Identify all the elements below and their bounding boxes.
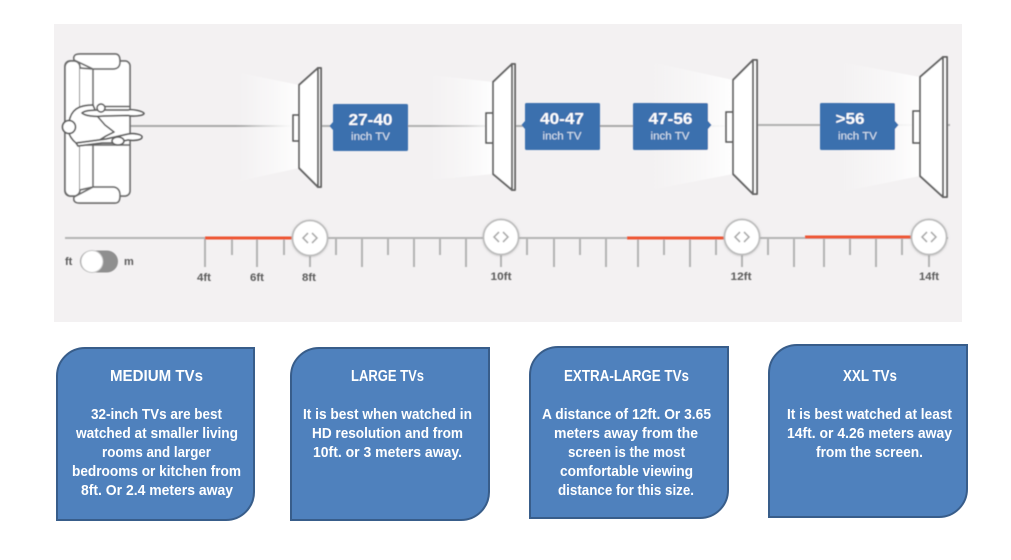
icon: TV 3: [650, 60, 757, 194]
ruler labels: 10ft: [490, 271, 512, 283]
card: large TVs: 10ft. or 3 meters away.: [313, 444, 462, 461]
card: extra-large TVs: EXTRA-LARGE TVs: [564, 368, 689, 385]
card: XXL TVs: from the screen.: [816, 444, 923, 461]
card: extra-large TVs: [530, 347, 728, 518]
card: extra-large TVs: A distance of 12ft. Or 3.65: [542, 406, 711, 423]
label: 40-47 inch TV: [522, 103, 600, 150]
ruler labels: 6ft: [250, 272, 264, 284]
card: medium TVs: 32-inch TVs are best: [91, 406, 222, 423]
card: medium TVs: [57, 348, 254, 520]
label: 40-47 inch TV: inch TV: [542, 130, 582, 142]
label: 27-40 inch TV: 27-40: [348, 112, 393, 129]
label: 40-47 inch TV: 40-47: [540, 111, 584, 128]
card: medium TVs: bedrooms or kitchen from: [72, 463, 241, 480]
card: XXL TVs: 14ft. or 4.26 meters away: [787, 425, 953, 442]
card: extra-large TVs: comfortable viewing: [560, 463, 693, 480]
label: 47-56 inch TV: 47-56: [648, 111, 693, 128]
icon: sofa seen from above: [65, 54, 130, 203]
label: 27-40 inch TV: [330, 104, 408, 151]
slider handle: 10ft: [484, 220, 518, 254]
slider handle: 8ft: [292, 220, 328, 256]
ruler labels: [197, 271, 939, 284]
distance ruler: [65, 220, 948, 267]
ruler labels: 14ft: [919, 271, 939, 283]
viewing axis line: [130, 124, 950, 127]
card: medium TVs: MEDIUM TVs: [110, 368, 203, 385]
card: medium TVs: 8ft. Or 2.4 meters away: [81, 482, 234, 499]
panel: viewing distance diagram: [54, 24, 962, 322]
card: large TVs: HD resolution and from: [312, 425, 463, 442]
ruler labels: 12ft: [730, 271, 752, 283]
card: medium TVs: watched at smaller living: [75, 425, 238, 442]
ruler labels: 8ft: [302, 272, 316, 284]
label: greater than 56 inch TV: >56: [836, 111, 865, 128]
label: greater than 56 inch TV: [820, 103, 898, 150]
unit toggle: ft / m: [65, 250, 134, 272]
icon: TV 1: [235, 68, 321, 187]
icon: TV 2: [430, 64, 515, 190]
icon: seated person: [62, 104, 144, 146]
card: extra-large TVs: distance for this size.: [558, 482, 694, 499]
card: large TVs: LARGE TVs: [351, 368, 424, 385]
label: greater than 56 inch TV: inch TV: [838, 130, 878, 142]
icon: TV 4: [840, 57, 947, 197]
card: XXL TVs: It is best watched at least: [787, 406, 952, 423]
slider handle: 12ft: [724, 220, 760, 254]
card: large TVs: [291, 348, 489, 520]
label: 47-56 inch TV: inch TV: [650, 130, 690, 142]
card: XXL TVs: [769, 345, 967, 517]
ruler labels: 4ft: [197, 272, 211, 284]
card: large TVs: It is best when watched in: [303, 406, 472, 423]
label: 27-40 inch TV: inch TV: [351, 131, 391, 143]
unit toggle: ft / m: ft: [65, 256, 73, 268]
card: extra-large TVs: meters away from the: [554, 425, 698, 442]
card: medium TVs: rooms and larger: [102, 444, 211, 461]
slider handle: 14ft: [912, 220, 946, 254]
unit toggle: ft / m: m: [124, 256, 134, 268]
label: 47-56 inch TV: [633, 103, 712, 150]
card: extra-large TVs: screen is the most: [568, 444, 685, 461]
card: XXL TVs: XXL TVs: [843, 368, 897, 385]
